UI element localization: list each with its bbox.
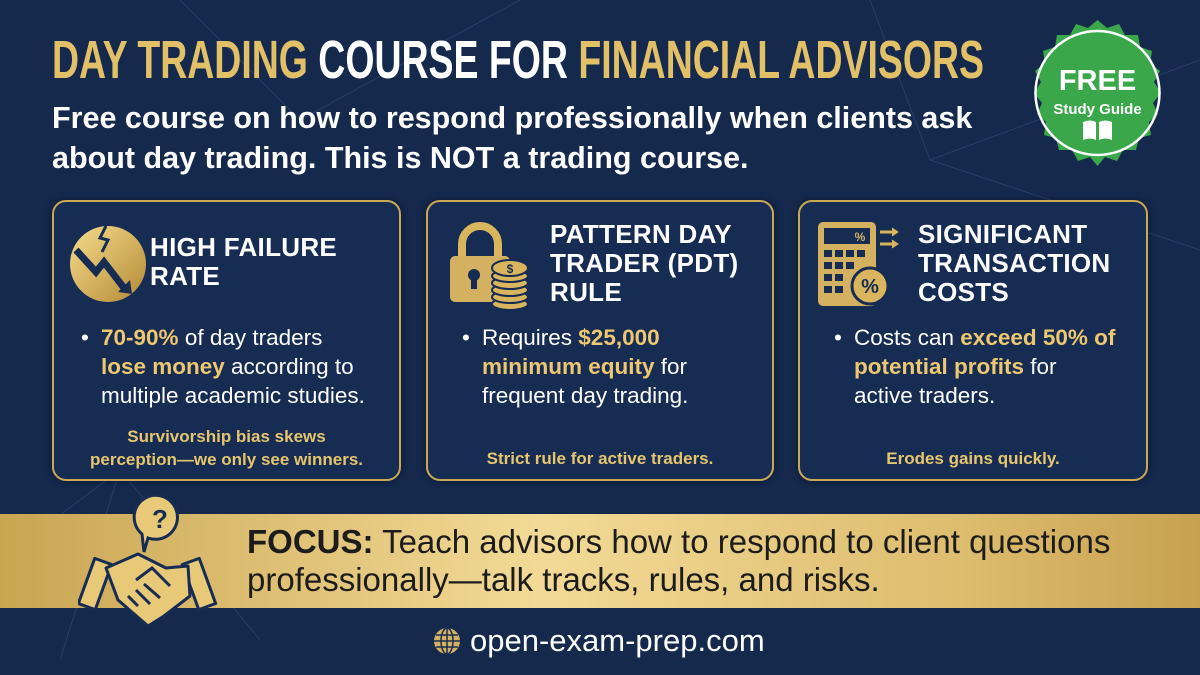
panel: PDT rule — [426, 200, 774, 481]
icon: calculator percent: % — [861, 276, 879, 298]
heading: TRADER (PDT) — [550, 248, 738, 278]
icon: falling chart coin — [70, 226, 146, 302]
bullet text: multiple academic studies. — [101, 383, 365, 408]
badge: free study guide: Study Guide — [1053, 101, 1142, 118]
panel: high failure rate: • — [81, 325, 89, 350]
footer url: open-exam-prep.com — [470, 623, 765, 658]
bullet text: frequent day trading. — [482, 383, 688, 408]
focus band — [0, 514, 1200, 608]
subtitle: Free course on how to respond professionally when clients ask — [52, 101, 972, 135]
heading — [150, 232, 337, 291]
icon: handshake with question bubble — [78, 496, 218, 624]
bullet text: lose money according to — [101, 354, 354, 379]
bullet text: minimum equity for — [482, 354, 687, 379]
bullet text: active traders. — [854, 383, 995, 408]
heading: SIGNIFICANT — [918, 219, 1087, 249]
heading: PATTERN DAY — [550, 219, 732, 249]
badge: free study guide — [1034, 20, 1161, 166]
panel: transaction costs: • — [834, 325, 842, 350]
note: Strict rule for active traders. — [487, 449, 713, 468]
bullet text: Costs can exceed 50% of — [854, 325, 1115, 350]
heading — [550, 219, 738, 307]
focus text: professionally—talk tracks, rules, and risks. — [247, 561, 880, 598]
panel: transaction costs — [798, 200, 1148, 481]
heading: COSTS — [918, 277, 1009, 307]
bullet text — [81, 325, 365, 408]
badge: free study guide: FREE — [1059, 65, 1136, 97]
note — [90, 427, 363, 469]
panel: high failure rate — [52, 200, 401, 481]
note: Survivorship bias skews — [127, 427, 326, 446]
heading: HIGH FAILURE — [150, 232, 337, 262]
bullet text — [834, 325, 1116, 408]
icon: globe — [434, 628, 460, 654]
bullet text — [462, 325, 688, 408]
heading: RULE — [550, 277, 622, 307]
focus text: FOCUS: Teach advisors how to respond to client questions — [247, 523, 1110, 560]
note: perception—we only see winners. — [90, 450, 363, 469]
icon: lock and coins: $ — [507, 262, 514, 276]
subtitle — [52, 101, 972, 175]
heading: TRANSACTION — [918, 248, 1111, 278]
heading: RATE — [150, 261, 220, 291]
subtitle: about day trading. This is NOT a trading course. — [52, 141, 749, 175]
bullet text: Requires $25,000 — [482, 325, 660, 350]
icon: lock and coins — [450, 222, 527, 309]
icon: handshake with question bubble: ? — [152, 504, 168, 534]
icon: calculator percent: % — [855, 230, 866, 244]
icon: calculator percent — [818, 222, 899, 306]
bullet text: potential profits for — [854, 354, 1057, 379]
focus text — [247, 523, 1110, 598]
panel: PDT rule: • — [462, 325, 470, 350]
bullet text: 70-90% of day traders — [101, 325, 322, 350]
note: Erodes gains quickly. — [886, 449, 1060, 468]
heading — [918, 219, 1111, 307]
